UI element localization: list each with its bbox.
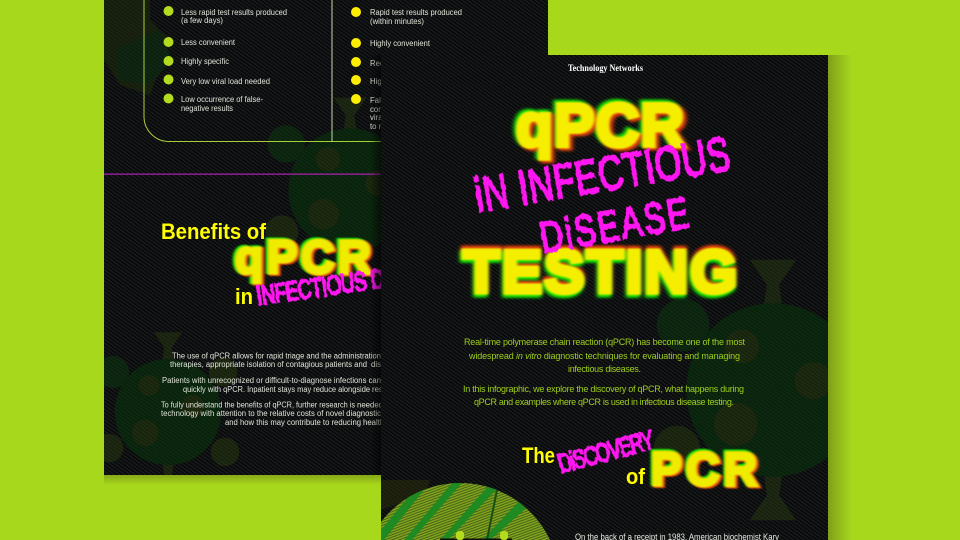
title: TESTING: TESTING (463, 236, 737, 303)
column: rapid test properties: to retesting (370, 122, 409, 131)
shadow cast by front page (370, 55, 381, 475)
column: qPCR properties: Low occurrence of false- (181, 95, 263, 104)
icon: striped circle illustration (381, 483, 550, 540)
text block: benefits: and how this may contribute to reducing (225, 418, 361, 427)
column: rapid test properties: viral loads, leading (370, 113, 435, 122)
text block: benefits: therapies, appropriate isolation of contagious patients and (170, 360, 367, 369)
title: qPCR: qPCR (514, 90, 682, 157)
panel: back page (95, 0, 548, 492)
heading: benefits of qPCR: qPCR (235, 231, 371, 283)
heading: the discovery of PCR: of (626, 464, 646, 489)
column: qPCR properties: negative results (181, 104, 233, 113)
column: rapid test properties (351, 7, 462, 131)
text block: benefits: resources. (372, 385, 408, 394)
publisher logo: Technology Networks (568, 63, 643, 73)
back page virus and camouflage shapes (104, 0, 381, 475)
heading: benefits of qPCR (161, 219, 452, 311)
column: rapid test properties: (within minutes) (370, 17, 424, 26)
divider line (104, 174, 382, 175)
front page virus and camouflage shapes (381, 260, 828, 520)
column: qPCR properties: Highly specific (181, 57, 229, 66)
text block: benefits: discharge planning. (371, 360, 439, 369)
infographic scene (104, 0, 848, 540)
text block: benefits: tools (384, 409, 401, 418)
text block: benefits: be diagnosed (384, 376, 431, 385)
column: rapid test properties: Reduced specificity (370, 59, 437, 68)
heading: benefits of qPCR: qPCR (233, 230, 369, 282)
text block: introduction: infectious diseases. (568, 364, 641, 374)
column: rapid test properties: High viral load needed (370, 77, 448, 86)
text block: introduction: In this infographic, we explore the discovery of qPCR, what happens during (463, 384, 744, 394)
heading: the discovery of PCR: The (522, 443, 555, 468)
heading: the discovery of PCR: PCR (650, 442, 756, 494)
text block: benefits: quickly with qPCR. Inpatient stays may reduce alongside (183, 385, 370, 394)
title: in infectious disease: iN INFECTIOUS (471, 126, 734, 222)
text block: introduction: qPCR and examples where qPCR is used in infectious disease testing. (474, 397, 734, 407)
column: qPCR properties: Very low viral load needed (181, 77, 270, 86)
column: rapid test properties: False-negative results (370, 96, 446, 105)
text block: benefits: technology with attention to the relative costs of novel diagnostic (161, 409, 381, 418)
title: TESTING: TESTING (462, 241, 736, 308)
text block: benefits: needed on this (357, 400, 408, 410)
column: qPCR properties: (a few days) (181, 16, 223, 25)
text block: introduction (463, 337, 745, 407)
panel: front page (381, 55, 828, 540)
column: rapid test properties: Highly convenient (370, 39, 431, 48)
heading: the discovery of PCR: PCR (653, 444, 759, 496)
column: qPCR properties: Less rapid test results produced (181, 8, 287, 17)
heading: benefits of qPCR: in (235, 284, 253, 309)
text block: benefits: The use of qPCR allows for rapid triage and the administration (172, 352, 381, 360)
text block: introduction: Real-time polymerase chain reaction (qPCR) has become one of the most (464, 337, 745, 347)
title: qPCR: qPCR (519, 94, 687, 161)
heading: benefits of qPCR: INFECTIOUS DISEASE (255, 254, 452, 311)
heading: benefits of qPCR: qPCR (237, 232, 373, 284)
column: rapid test properties: Rapid test results produced (370, 8, 462, 17)
title: in infectious disease: DiSEASE (536, 189, 692, 263)
title: TESTING: TESTING (463, 238, 737, 306)
column: qPCR properties (164, 6, 287, 113)
title: qPCR: qPCR (516, 92, 684, 159)
page shadow on background (104, 55, 852, 540)
text block: introduction: widespread in vitro diagnostic techniques for evaluating and managing (468, 351, 740, 361)
text block: benefits: of appropriate (384, 352, 432, 360)
heading: benefits of qPCR: Benefits of (161, 219, 267, 244)
column: rapid test properties: common at low (370, 105, 423, 114)
text block: benefits: healthcare costs. (363, 418, 422, 427)
text block: benefits: To fully understand the benefits of qPCR, further research is (161, 400, 355, 410)
text block: benefits: Patients with unrecognized or difficult-to-diagnose infections can (162, 376, 381, 385)
heading: the discovery of PCR: PCR (651, 443, 757, 495)
text block: benefits (161, 352, 439, 427)
heading: the discovery of PCR (522, 425, 759, 496)
heading: the discovery of PCR: DiSCOVERY (555, 425, 657, 479)
comparison table outline (144, 0, 382, 142)
column: qPCR properties: Less convenient (181, 38, 236, 47)
